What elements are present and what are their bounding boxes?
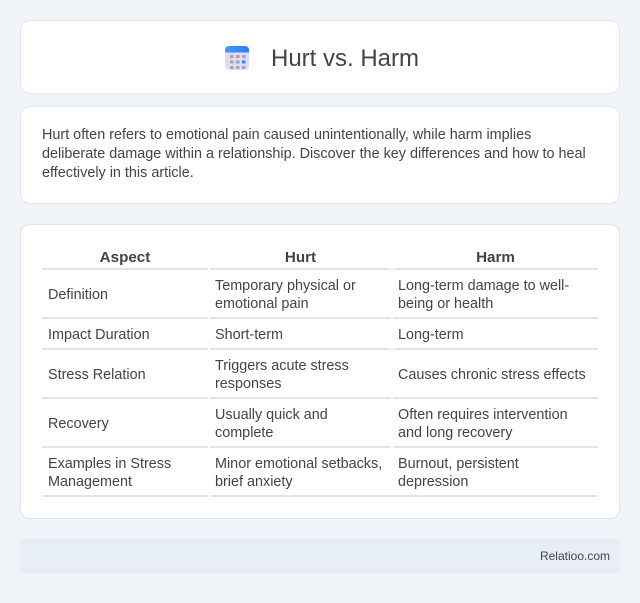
table rows: Triggers acute stress: [215, 358, 349, 374]
table rows: complete: [215, 425, 273, 441]
table rows: Causes chronic stress effects: [398, 367, 586, 383]
intro text: [42, 127, 586, 181]
intro text: effectively in this article.: [42, 165, 194, 181]
table header: Hurt: [285, 249, 316, 266]
table rows: Examples in Stress: [48, 456, 171, 472]
title: Hurt vs. Harm: [271, 45, 419, 72]
intro text: Hurt often refers to emotional pain caused unintentionally, while harm implies: [42, 127, 531, 143]
footer bar: [20, 539, 620, 573]
panel: introduction: [20, 106, 620, 204]
table header: Harm: [476, 249, 515, 266]
table rows: Temporary physical or: [215, 278, 356, 294]
table rows: Stress Relation: [48, 367, 146, 383]
table header: Aspect: [100, 249, 150, 266]
table rows: Long-term: [398, 327, 464, 343]
table rows: Recovery: [48, 416, 109, 432]
table header: [100, 249, 515, 266]
table rows: being or health: [398, 296, 493, 312]
panel: comparison table: [20, 224, 620, 519]
footer source text: Relatioo.com: [540, 549, 610, 563]
panel: title card: [20, 20, 620, 94]
icon: calendar: [225, 46, 249, 70]
table rows: responses: [215, 376, 281, 392]
table rows: Impact Duration: [48, 327, 150, 343]
table rows: Often requires intervention: [398, 407, 568, 423]
table rows: Burnout, persistent: [398, 456, 519, 472]
table rows: brief anxiety: [215, 474, 293, 490]
table rows: Definition: [48, 287, 108, 303]
table rows: Long-term damage to well-: [398, 278, 569, 294]
table rows: Minor emotional setbacks,: [215, 456, 382, 472]
table rows: and long recovery: [398, 425, 512, 441]
table rows: Management: [48, 474, 132, 490]
table rows: Usually quick and: [215, 407, 328, 423]
table rows: emotional pain: [215, 296, 309, 312]
intro text: deliberate damage within a relationship. Discover the key differences and how to heal: [42, 146, 586, 162]
table rows: [42, 268, 598, 497]
table rows: Short-term: [215, 327, 283, 343]
table rows: depression: [398, 474, 468, 490]
